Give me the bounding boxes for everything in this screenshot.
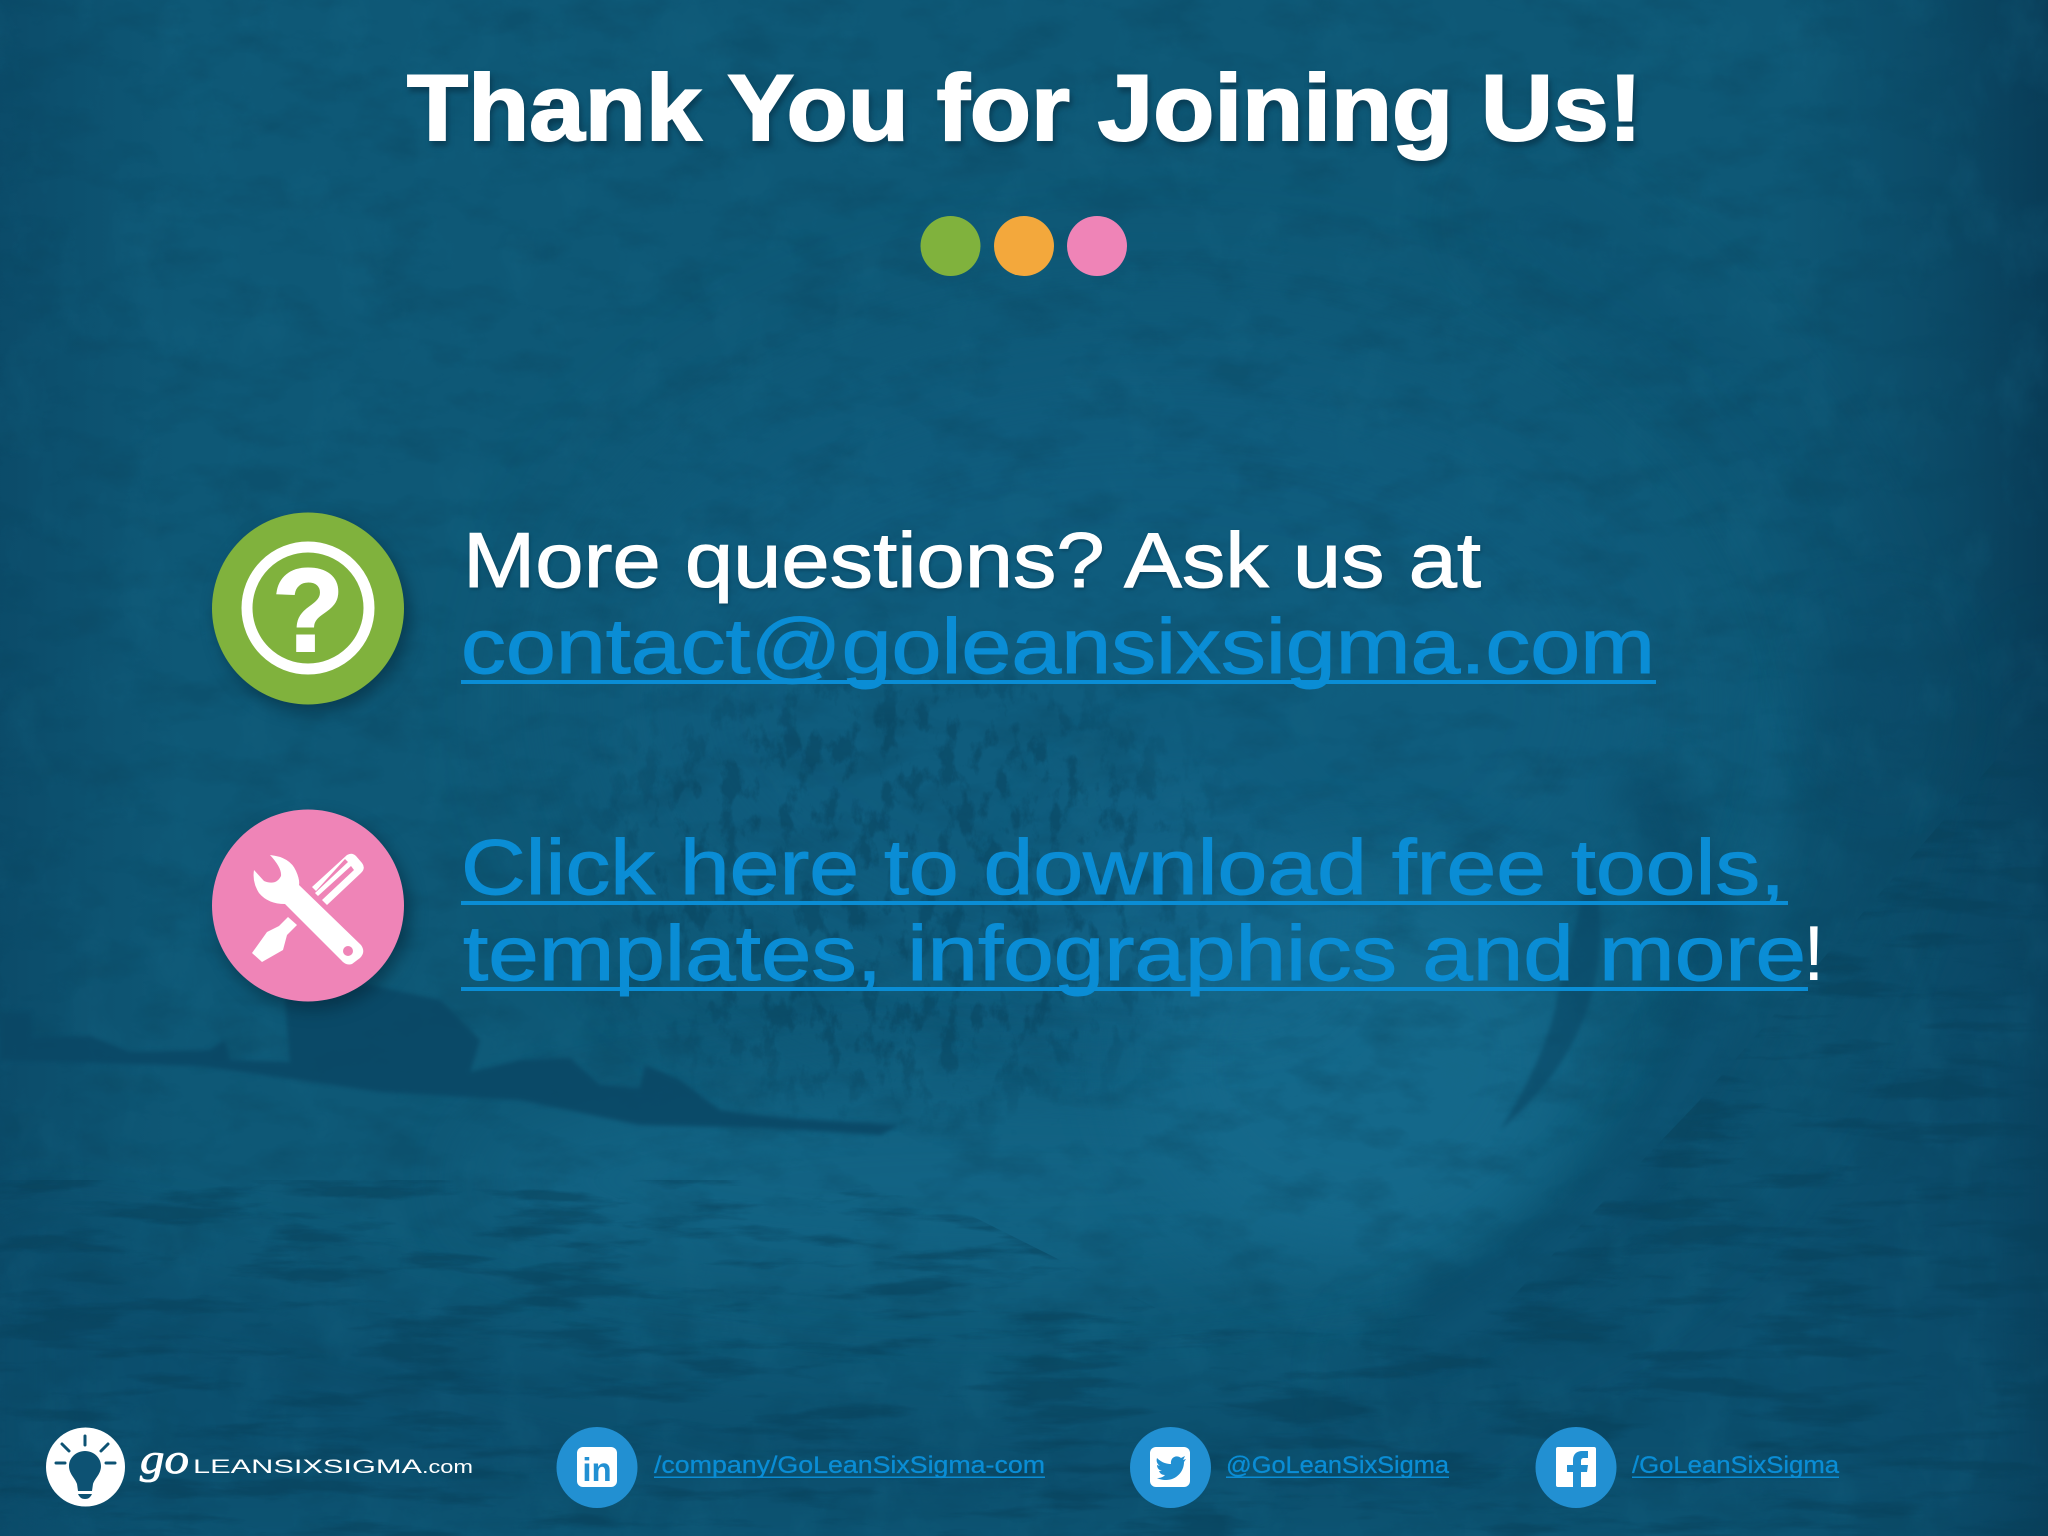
- LinkedIn link: /company/GoLeanSixSigma-com: [654, 1452, 1045, 1479]
- decorative three dots: [920, 216, 1127, 276]
- wordmark: go: [140, 1437, 189, 1483]
- icon: LinkedIn: [556, 1427, 638, 1508]
- icon: wrench and screwdriver in pink circle: [212, 810, 404, 1002]
- icon: LinkedIn: in: [582, 1451, 612, 1488]
- link line two: templates, infographics and more: [463, 909, 1806, 997]
- icon: Twitter bird: [1130, 1427, 1211, 1508]
- icon: question mark in green circle: [212, 512, 404, 704]
- link line one: Click here to download free tools,: [461, 823, 1785, 911]
- title: Thank You for Joining Us!: [407, 55, 1642, 160]
- wordmark: [140, 1437, 473, 1483]
- social: Facebook: [1536, 1427, 1840, 1508]
- text block: download link: [461, 823, 1825, 997]
- Facebook link: /GoLeanSixSigma: [1632, 1452, 1840, 1479]
- logo: GoLeanSixSigma: [46, 1428, 473, 1506]
- icon: light bulb: [46, 1428, 125, 1506]
- social: LinkedIn: [556, 1427, 1045, 1508]
- icon: question mark in green circle: ?: [272, 545, 344, 677]
- social: Twitter: [1130, 1427, 1450, 1508]
- wordmark: .com: [422, 1457, 473, 1477]
- exclamation mark: !: [1803, 909, 1825, 997]
- wrench: [254, 855, 363, 964]
- screwdriver: [252, 854, 364, 962]
- question prompt: More questions? Ask us at: [463, 516, 1481, 604]
- icon: Facebook: [1536, 1427, 1616, 1508]
- wordmark: LEANSIXSIGMA: [193, 1457, 423, 1478]
- text block: questions contact: [461, 516, 1656, 690]
- Twitter link: @GoLeanSixSigma: [1226, 1452, 1450, 1479]
- email link: contact@goleansixsigma.com: [461, 602, 1655, 690]
